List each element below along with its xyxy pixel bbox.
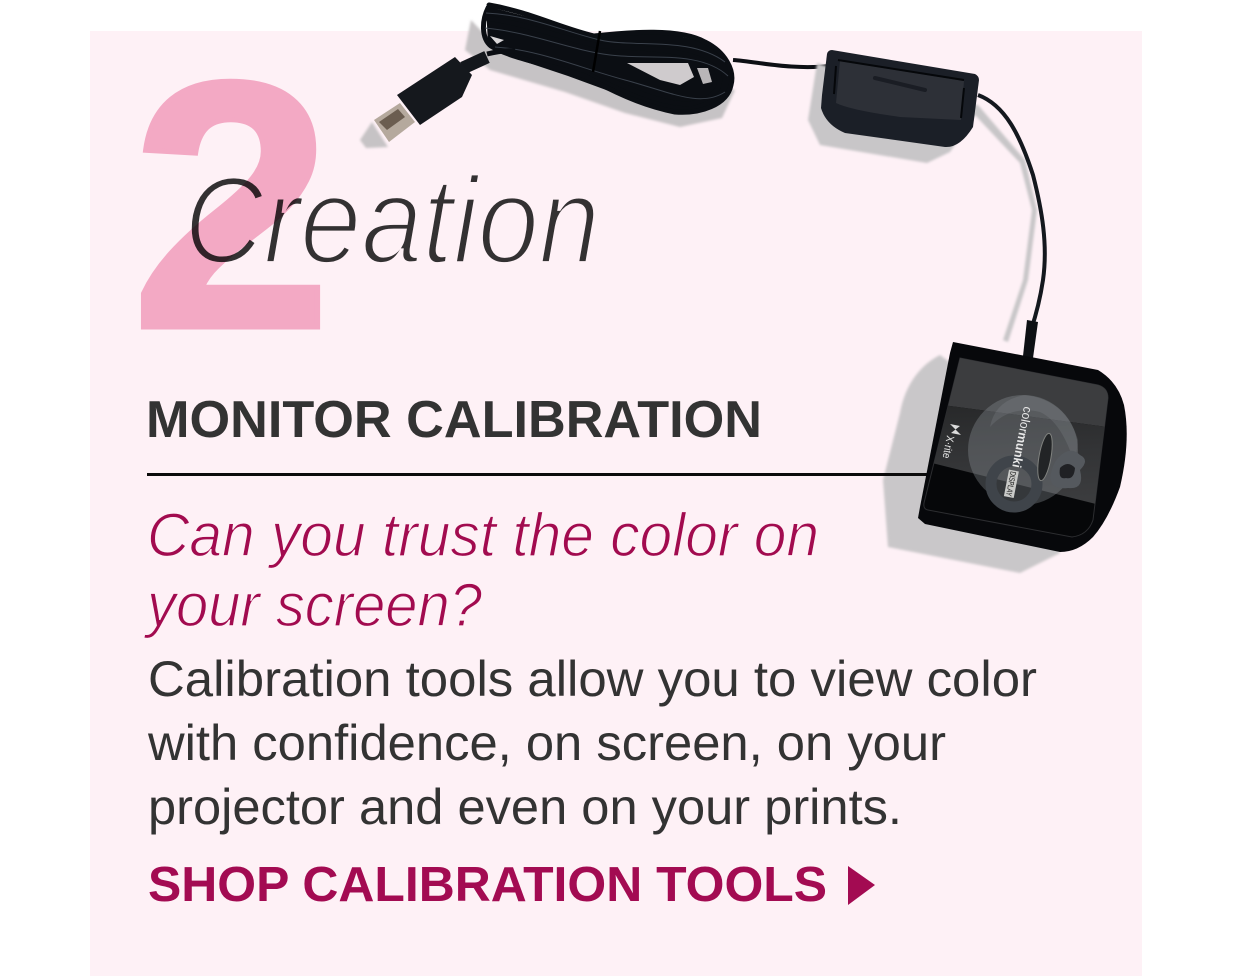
heading: Creation: Creation (184, 153, 600, 290)
body text: Calibration tools allow you to view color (148, 651, 1037, 707)
call to action link: SHOP CALIBRATION TOOLS (148, 858, 827, 912)
label: x-rite: X·rite (940, 434, 956, 459)
photo: USB cable and coil (360, 5, 830, 148)
photo: inline control box and cable (808, 50, 1045, 358)
big numeral 2: 2 (131, 8, 332, 402)
icon: x-rite mark (950, 424, 961, 435)
body text: with confidence, on screen, on your (147, 715, 946, 771)
tagline question: Can you trust the color on (147, 501, 819, 569)
icon: arrow (848, 866, 875, 905)
label: display tag (1004, 470, 1019, 498)
photo: colormunki display device (918, 342, 1127, 552)
label: display tag: DISPLAY (1004, 471, 1018, 497)
tagline question (143, 501, 819, 639)
subheading: monitor calibration: MONITOR CALIBRATION (146, 391, 762, 449)
body text (147, 651, 1037, 835)
tagline question: your screen? (143, 571, 482, 639)
divider rule (147, 473, 932, 476)
label: colormunki: colormunki (1009, 405, 1035, 469)
shadow of device (883, 355, 1060, 573)
logo: monkey circles (968, 395, 1085, 507)
body text: projector and even on your prints. (148, 779, 902, 835)
